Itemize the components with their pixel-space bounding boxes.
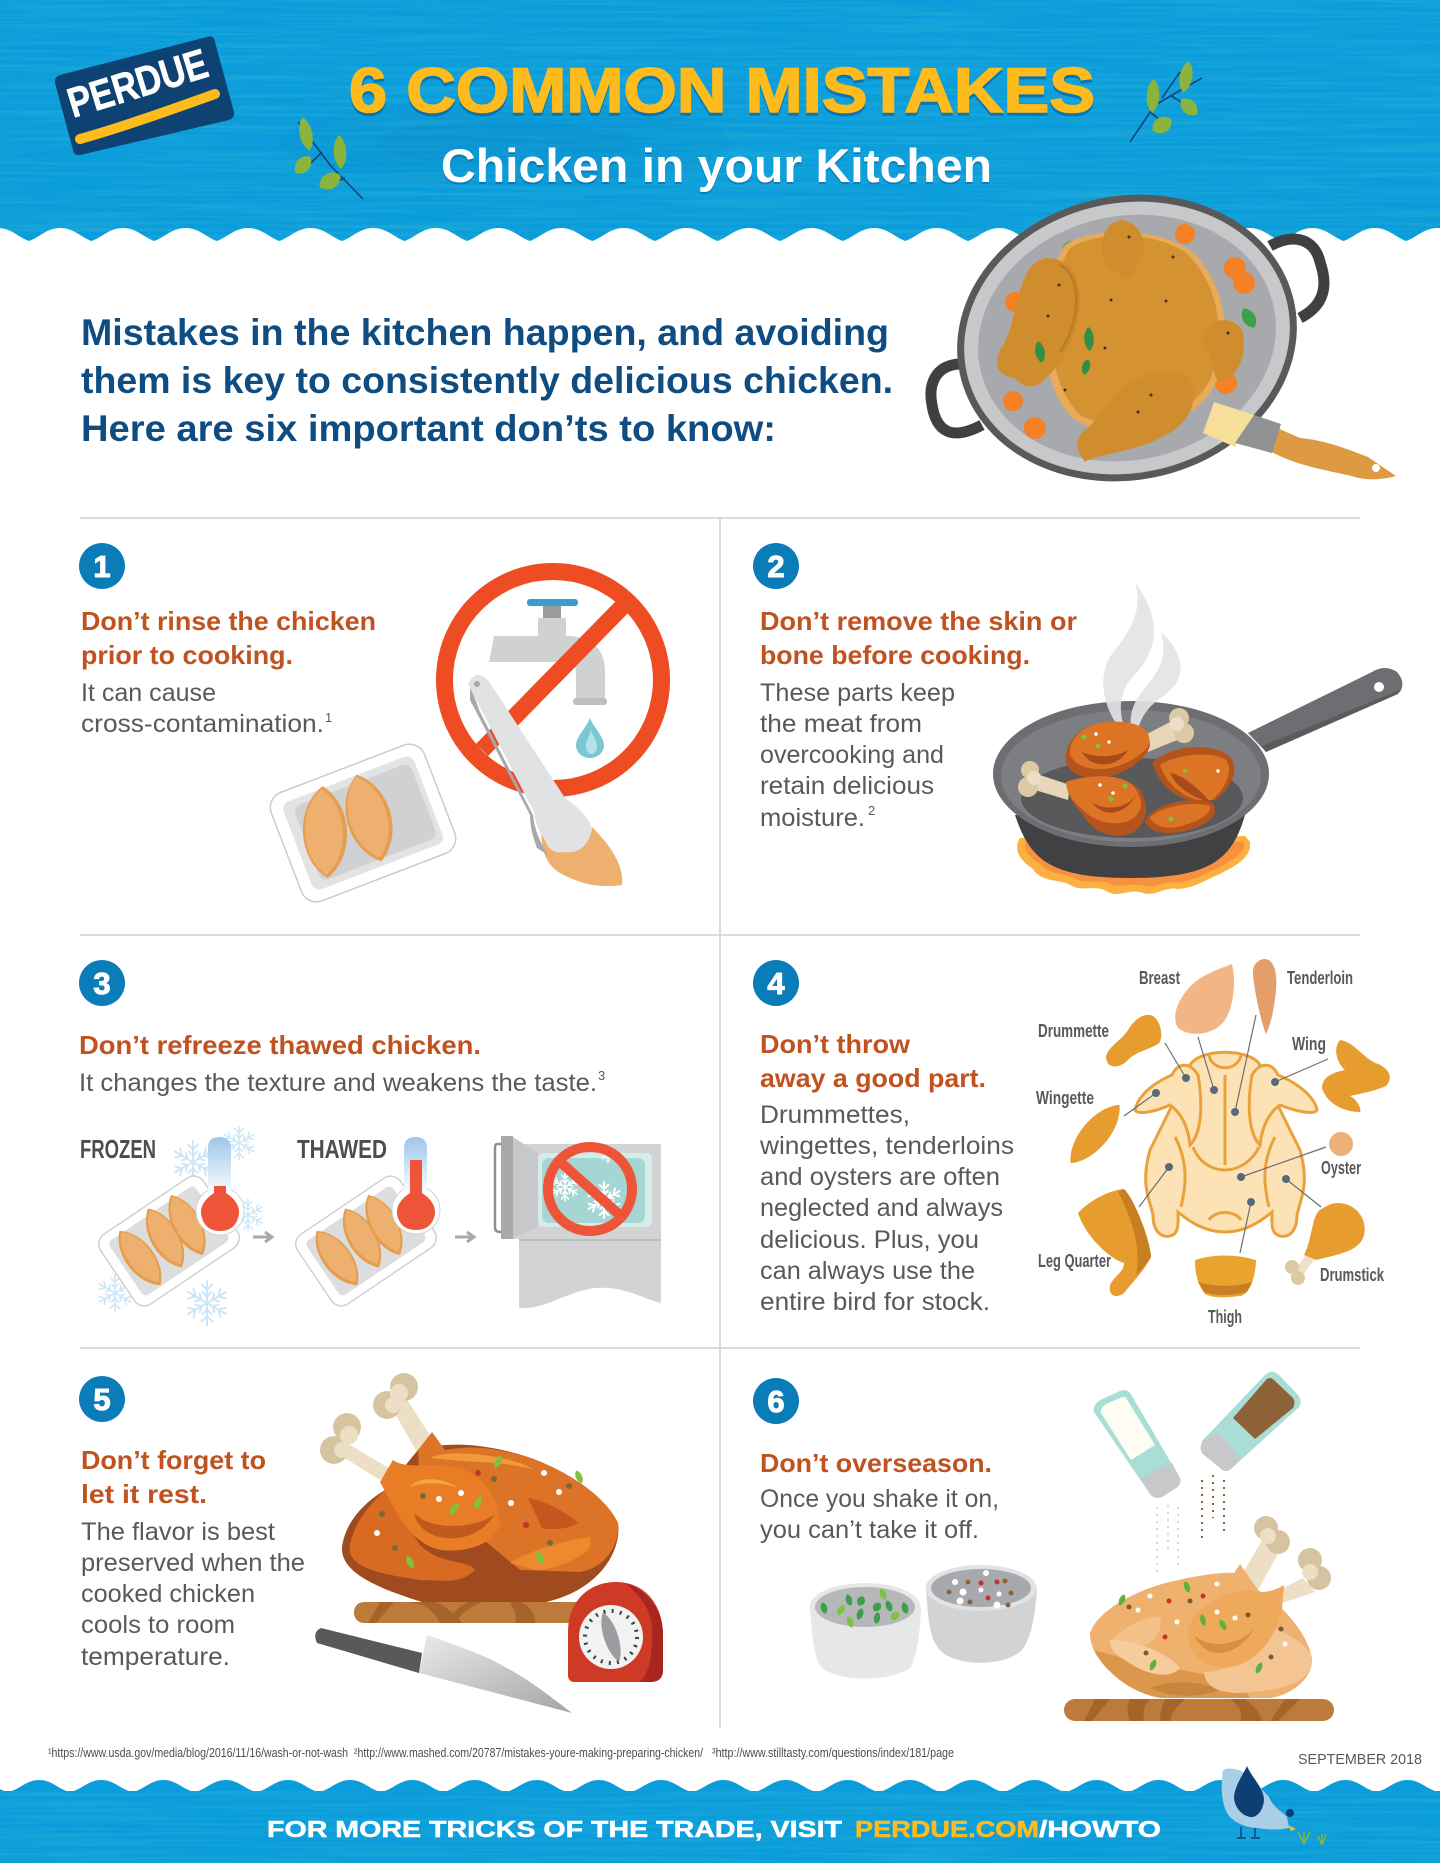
leader lines and dots xyxy=(1124,1015,1328,1253)
part labels: Breast xyxy=(1139,968,1180,988)
logo: Perdue xyxy=(55,37,234,155)
body 1: It can cause xyxy=(81,679,216,707)
icon: pepper shaker xyxy=(1201,1372,1301,1543)
body 6: you can’t take it off. xyxy=(760,1516,979,1544)
intro text xyxy=(81,312,893,449)
panel 5: don't forget to let it rest xyxy=(79,1373,663,1713)
icon: chef knife xyxy=(315,1628,572,1713)
footer call to action: FOR MORE TRICKS OF THE TRADE, VISIT xyxy=(267,1816,842,1842)
heading 4: Don’t throw xyxy=(760,1029,911,1059)
number badge 1 xyxy=(79,543,125,589)
number badge 5: 5 xyxy=(93,1382,111,1417)
number badge 2 xyxy=(753,543,799,589)
frozen tray with thermometer: FROZEN xyxy=(80,1134,156,1164)
frozen tray with thermometer xyxy=(80,1126,264,1325)
number badge 4 xyxy=(753,960,799,1006)
part labels: Drummette xyxy=(1038,1021,1109,1041)
heading 2: Don’t remove the skin or xyxy=(760,606,1077,636)
part labels: Leg Quarter xyxy=(1038,1251,1111,1271)
number badge 2: 2 xyxy=(767,549,785,584)
subtitle: Chicken in your Kitchen xyxy=(441,139,992,192)
body 4: neglected and always xyxy=(760,1194,1003,1222)
parts xyxy=(1175,964,1234,1034)
icon: bird xyxy=(1222,1766,1326,1845)
panel 3: don't refreeze xyxy=(79,960,661,1325)
icon: herb sprig right xyxy=(1130,60,1202,142)
part labels: Wingette xyxy=(1036,1088,1094,1108)
body 4: entire bird for stock. xyxy=(760,1288,990,1316)
heading 3: Don’t refreeze thawed chicken. xyxy=(79,1030,481,1060)
panel 6: don't overseason xyxy=(753,1372,1334,1721)
heading 5 xyxy=(81,1445,266,1509)
icon: freezer with prohibition sign xyxy=(495,1136,661,1308)
icon: tongs holding chicken xyxy=(468,675,622,886)
heading 1 xyxy=(81,606,376,670)
thawed tray with thermometer: THAWED xyxy=(297,1134,387,1164)
number badge 6: 6 xyxy=(767,1384,785,1419)
icon: herb sprig left xyxy=(290,116,363,199)
footnotes xyxy=(48,1745,954,1760)
body 5: preserved when the xyxy=(81,1549,305,1577)
thigh and wing pieces xyxy=(1145,747,1234,833)
body 4: can always use the xyxy=(760,1257,975,1285)
icon: kitchen timer xyxy=(568,1582,663,1682)
illustration: roast chicken on cutting board xyxy=(320,1373,618,1623)
arrow xyxy=(253,1232,272,1242)
heading 1: prior to cooking. xyxy=(81,640,293,670)
icon: faucet with prohibition sign xyxy=(444,572,662,788)
diagram: chicken parts xyxy=(1036,959,1390,1327)
heading 2: bone before cooking. xyxy=(760,640,1030,670)
body 5 xyxy=(81,1518,305,1671)
footer banner xyxy=(0,1780,1440,1863)
panel 4: don't throw away a good part xyxy=(753,959,1390,1327)
icon: bowl of spices xyxy=(926,1565,1037,1663)
title: 6 COMMON MISTAKES xyxy=(349,56,1095,126)
heading 5: let it rest. xyxy=(81,1479,207,1509)
intro text: Here are six important don’ts to know: xyxy=(81,408,776,449)
part labels: Drumstick xyxy=(1320,1265,1385,1285)
number badge 5 xyxy=(79,1376,125,1422)
part labels: Thigh xyxy=(1208,1307,1242,1327)
chicken outline xyxy=(1135,1052,1317,1236)
body 2: 2 xyxy=(868,803,875,818)
heading 4 xyxy=(760,1029,986,1093)
footnotes: ³http://www.stilltasty.com/questions/index/181/page xyxy=(712,1745,954,1760)
body 6 xyxy=(760,1485,999,1544)
body 5: cools to room xyxy=(81,1611,235,1639)
body 1: 1 xyxy=(325,710,332,725)
body 5: cooked chicken xyxy=(81,1580,255,1608)
footer call to action xyxy=(267,1816,1161,1842)
body 2: overcooking and xyxy=(760,741,944,769)
part labels xyxy=(1036,968,1385,1327)
heading 2 xyxy=(760,606,1077,670)
heading 1: Don’t rinse the chicken xyxy=(81,606,376,636)
icon: salt shaker xyxy=(1094,1390,1180,1573)
heading 6: Don’t overseason. xyxy=(760,1448,992,1478)
number badge 1: 1 xyxy=(93,549,111,584)
number badge 6 xyxy=(753,1378,799,1424)
heading 5: Don’t forget to xyxy=(81,1445,266,1475)
body 2: the meat from xyxy=(760,710,922,738)
icon: tray with chicken breasts xyxy=(266,739,460,907)
body 6: Once you shake it on, xyxy=(760,1485,999,1513)
body 3: It changes the texture and weakens the taste. xyxy=(79,1069,597,1097)
body 2 xyxy=(760,679,955,832)
panel 1: don't rinse xyxy=(79,543,662,907)
body 2: retain delicious xyxy=(760,772,934,800)
footer call to action: /HOWTO xyxy=(1039,1816,1161,1842)
number badge 3: 3 xyxy=(93,966,111,1001)
body 4 xyxy=(759,1101,1014,1316)
part labels: Oyster xyxy=(1321,1158,1361,1178)
body 4: delicious. Plus, you xyxy=(760,1226,979,1254)
body 4: wingettes, tenderloins xyxy=(759,1132,1014,1160)
intro text: them is key to consistently delicious chicken. xyxy=(81,360,893,401)
footnotes: ²http://www.mashed.com/20787/mistakes-youre-making-preparing-chicken/ xyxy=(354,1745,703,1760)
drumstick lower xyxy=(1018,761,1146,836)
footer call to action: PERDUE.COM xyxy=(855,1816,1039,1842)
part labels: Wing xyxy=(1292,1034,1326,1054)
date: SEPTEMBER 2018 xyxy=(1298,1751,1422,1768)
body 2: These parts keep xyxy=(760,679,955,707)
arrow xyxy=(455,1232,474,1242)
header banner: blue wood background xyxy=(0,0,1440,241)
footnotes: ¹https://www.usda.gov/media/blog/2016/11/16/wash-or-not-wash xyxy=(48,1745,348,1760)
body 4: Drummettes, xyxy=(760,1101,910,1129)
panel 2: don't remove skin xyxy=(753,543,1402,894)
number badge 3 xyxy=(79,960,125,1006)
body 4: and oysters are often xyxy=(760,1163,1000,1191)
part labels: Tenderloin xyxy=(1287,968,1353,988)
illustration: roasting pan with chicken and brush xyxy=(930,164,1396,512)
body 5: temperature. xyxy=(81,1643,230,1671)
body 5: The flavor is best xyxy=(81,1518,275,1546)
logo: Perdue: PERDUE xyxy=(62,40,213,127)
illustration: seasoned chicken on cutting board xyxy=(1064,1516,1334,1721)
thawed tray with thermometer xyxy=(291,1134,441,1310)
body 1: cross-contamination. xyxy=(81,710,324,738)
heading 4: away a good part. xyxy=(760,1063,986,1093)
body 3: 3 xyxy=(598,1068,605,1083)
body 2: moisture. xyxy=(760,804,865,832)
number badge 4: 4 xyxy=(767,966,785,1001)
icon: bowl of herbs xyxy=(810,1583,921,1678)
body 1 xyxy=(81,679,332,738)
intro text: Mistakes in the kitchen happen, and avoiding xyxy=(81,312,889,353)
illustration: frying pan with chicken xyxy=(993,582,1402,894)
drumstick upper xyxy=(1066,708,1194,778)
